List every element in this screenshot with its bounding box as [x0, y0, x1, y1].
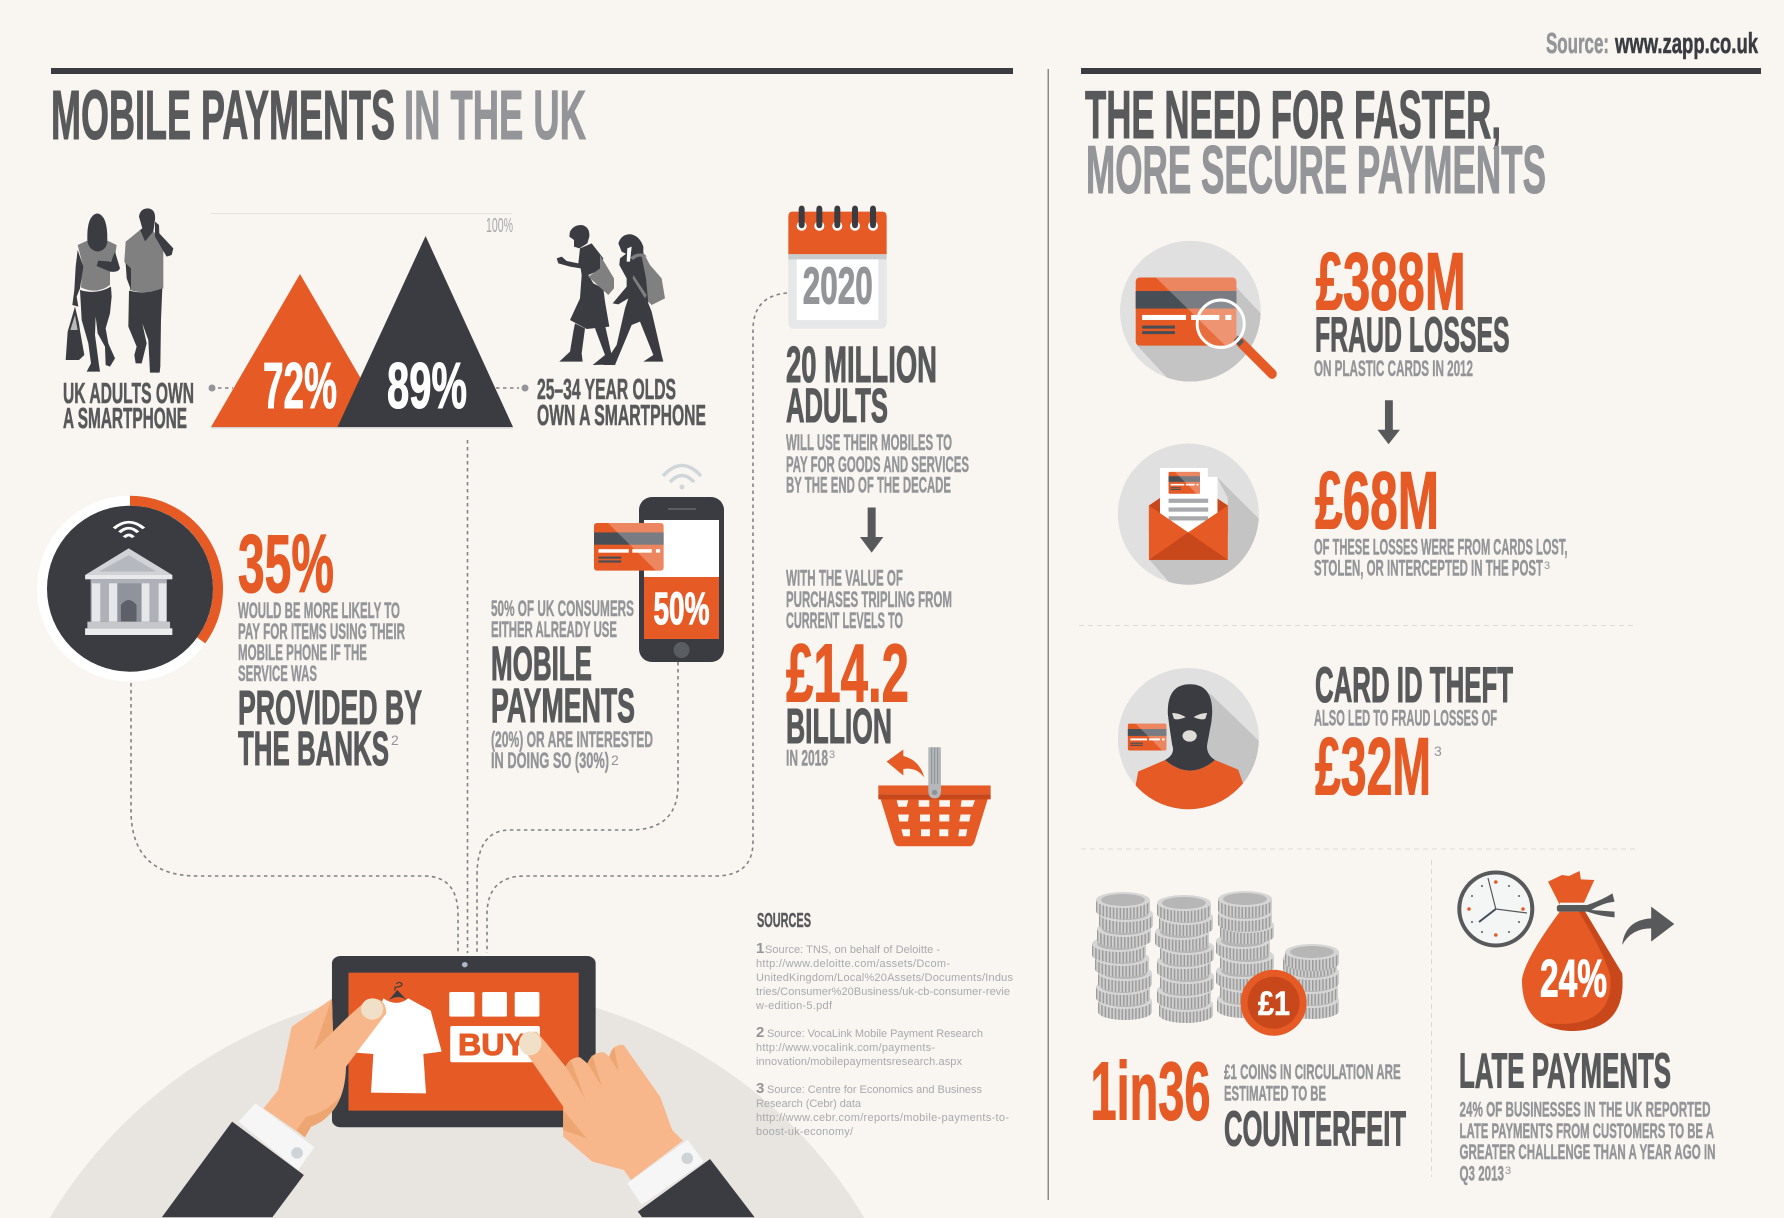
stat: 50 percent mobile payments: 50% OF UK CONSUMERS [491, 596, 634, 621]
stat: 14.2 billion: PURCHASES TRIPLING FROM [786, 587, 952, 612]
icon: card under magnifier [1120, 241, 1279, 391]
stat: 35 percent banks: 35% [238, 517, 334, 610]
sources: Source: TNS, on behalf of Deloitte - [765, 944, 940, 956]
sources continued: 3 [756, 1080, 764, 1097]
stat: 50 percent mobile payments: (20%) OR ARE INTERESTED [491, 727, 653, 752]
stat: 35 percent banks: THE BANKS [238, 723, 389, 776]
sources continued [756, 1080, 1009, 1138]
stat: 35 percent banks: 2 [391, 732, 399, 748]
icon: coin stacks [1092, 891, 1339, 1036]
stat: 14.2 billion: CURRENT LEVELS TO [786, 608, 903, 633]
sources: http://www.vocalink.com/payments- [756, 1042, 935, 1054]
stat: card ID theft [1314, 657, 1513, 812]
connector left [208, 384, 233, 392]
sources: UnitedKingdom/Local%20Assets/Documents/Indus [756, 972, 1014, 984]
left hand and sleeve [162, 998, 386, 1217]
stat: 20 million adults: BY THE END OF THE DECADE [786, 472, 951, 498]
stat: 1 in 36 counterfeit: COUNTERFEIT [1224, 1103, 1406, 1157]
stat: card ID theft: £32M [1315, 722, 1431, 812]
label: 25-34 year olds: OWN A SMARTPHONE [537, 400, 706, 432]
stat: 14.2 billion: BILLION [786, 700, 892, 754]
smartphone ownership chart [208, 213, 528, 428]
dashed connector lines [131, 293, 787, 953]
icon: money bag [1522, 871, 1623, 1031]
background arc behind tablet [50, 987, 864, 1218]
stat: 35 percent banks: SERVICE WAS [238, 661, 317, 686]
stat: 14.2 billion: £14.2 [786, 627, 909, 720]
stat: 20 million adults: WILL USE THEIR MOBILES TO [786, 430, 952, 455]
arrow: rising [1622, 907, 1674, 945]
stat: 68M: STOLEN, OR INTERCEPTED IN THE POST [1314, 556, 1543, 581]
stat: 14.2 billion [786, 566, 952, 770]
source line [1546, 28, 1759, 60]
label: UK adults [63, 378, 194, 435]
label: UK adults: A SMARTPHONE [63, 403, 187, 435]
title: mobile payments in the UK: IN THE UK [404, 76, 586, 154]
stat: 35 percent banks [238, 517, 422, 776]
stat: 35 percent banks: PROVIDED BY [238, 682, 422, 735]
stat: 50 percent mobile payments: IN DOING SO (30%) [491, 748, 609, 773]
stat: late payments: Q3 2013 [1460, 1163, 1504, 1186]
sources: http://www.deloitte.com/assets/Dcom- [756, 958, 950, 970]
stat: 388M fraud losses [1314, 237, 1510, 381]
stat: 50 percent mobile payments [491, 596, 653, 773]
icon: young people with smartphones [557, 225, 665, 365]
icon: clock [1459, 872, 1532, 946]
icon: smartphone with card: 50% [654, 583, 710, 634]
stat: 388M fraud losses: £388M [1316, 237, 1466, 328]
sources continued: http://www.cebr.com/reports/mobile-payments-to- [756, 1112, 1009, 1124]
sources: tries/Consumer%20Business/uk-cb-consumer-revie [756, 986, 1010, 998]
sources: w-edition-5.pdf [755, 1000, 833, 1012]
stat: 1 in 36 counterfeit [1090, 1044, 1406, 1157]
triangle: 89 percent [338, 236, 513, 427]
connector right [496, 384, 528, 392]
right hand and sleeve [519, 1031, 755, 1217]
tablet [332, 956, 596, 1127]
stat: 50 percent mobile payments: MOBILE [491, 638, 592, 691]
stat: late payments: 3 [1505, 1165, 1511, 1177]
bank stat icon [37, 496, 223, 682]
label: 25-34 year olds [537, 374, 706, 432]
icon: masked thief [1118, 668, 1265, 816]
stat: 388M fraud losses: FRAUD LOSSES [1315, 309, 1510, 363]
buy label: BUY [458, 1027, 526, 1062]
stat: 20 million adults: 20 MILLION [786, 336, 937, 393]
pound coin: £1 [1258, 985, 1290, 1023]
triangle: 89 percent: 89% [387, 349, 467, 422]
label: UK adults: UK ADULTS OWN [63, 378, 194, 410]
stat: 14.2 billion: WITH THE VALUE OF [786, 566, 903, 590]
icon: envelope with card [1118, 444, 1265, 590]
triangle: 72 percent [211, 274, 389, 427]
product tiles [449, 992, 539, 1017]
source line: Source: [1546, 28, 1609, 60]
stat: 1 in 36 counterfeit: 1in36 [1090, 1044, 1210, 1137]
sources: innovation/mobilepaymentsresearch.aspx [756, 1056, 962, 1068]
sources: 2 [756, 1024, 764, 1041]
stat: card ID theft: ALSO LED TO FRAUD LOSSES OF [1314, 706, 1497, 731]
sources continued: boost-uk-economy/ [756, 1126, 854, 1138]
calendar year label: 2020 [803, 258, 873, 316]
stat: 68M: £68M [1315, 456, 1439, 546]
stat: 14.2 billion: 3 [829, 749, 835, 761]
stat: 68M [1314, 456, 1568, 581]
stat: 35 percent banks: WOULD BE MORE LIKELY TO [238, 598, 400, 623]
stat: late payments [1459, 1045, 1716, 1186]
stat: 35 percent banks: PAY FOR ITEMS USING THEIR [238, 619, 405, 644]
stat: 388M fraud losses: ON PLASTIC CARDS IN 2012 [1314, 356, 1473, 381]
icon: smartphone with card [594, 466, 724, 662]
left top rule [51, 68, 1013, 74]
smartphone ownership chart: 100% [486, 215, 513, 237]
icon: bank building [85, 522, 172, 635]
triangle: 72 percent: 72% [263, 349, 337, 422]
column divider [1430, 860, 1432, 1177]
stat: 68M: 3 [1544, 560, 1550, 572]
stat: 20 million adults: ADULTS [786, 380, 888, 433]
right top rule [1081, 68, 1761, 74]
sources: SOURCES [757, 910, 811, 932]
stat: 20 million adults [786, 336, 969, 498]
label: 25-34 year olds: 25–34 YEAR OLDS [537, 374, 676, 406]
stat: 50 percent mobile payments: EITHER ALREADY USE [491, 617, 617, 642]
column divider [1048, 69, 1049, 1200]
section divider [1081, 848, 1636, 850]
title: the need for faster, more secure payments [1085, 77, 1546, 208]
stat: 20 million adults: PAY FOR GOODS AND SERVICES [786, 452, 969, 477]
sources [755, 910, 1014, 1068]
icon: shopping basket [878, 747, 991, 846]
sources: 1 [756, 940, 764, 957]
stat: 35 percent banks: MOBILE PHONE IF THE [238, 640, 367, 665]
stat: 1 in 36 counterfeit: ESTIMATED TO BE [1224, 1083, 1326, 1106]
sources continued: Research (Cebr) data [756, 1098, 862, 1110]
title: mobile payments in the UK: MOBILE PAYMENTS [51, 76, 395, 154]
sources: Source: VocaLink Mobile Payment Research [767, 1028, 983, 1040]
shirt on hanger [355, 982, 442, 1093]
stat: 1 in 36 counterfeit: £1 COINS IN CIRCULATION ARE [1224, 1061, 1401, 1084]
sources continued: Source: Centre for Economics and Business [767, 1084, 982, 1096]
buy button [450, 1026, 540, 1062]
section divider [1079, 624, 1634, 626]
stat: 50 percent mobile payments: PAYMENTS [491, 680, 635, 733]
arrow down [1377, 400, 1400, 444]
stat: card ID theft: CARD ID THEFT [1315, 657, 1513, 713]
arrow down [860, 507, 883, 553]
stat: 50 percent mobile payments: 2 [611, 752, 619, 768]
pound coin [1241, 970, 1307, 1036]
stat: card ID theft: 3 [1434, 743, 1442, 759]
icon: adults with smartphones [66, 208, 173, 373]
bag percentage: 24% [1540, 950, 1607, 1009]
icon: calendar 2020 [788, 206, 887, 329]
stat: 14.2 billion: IN 2018 [786, 746, 828, 770]
